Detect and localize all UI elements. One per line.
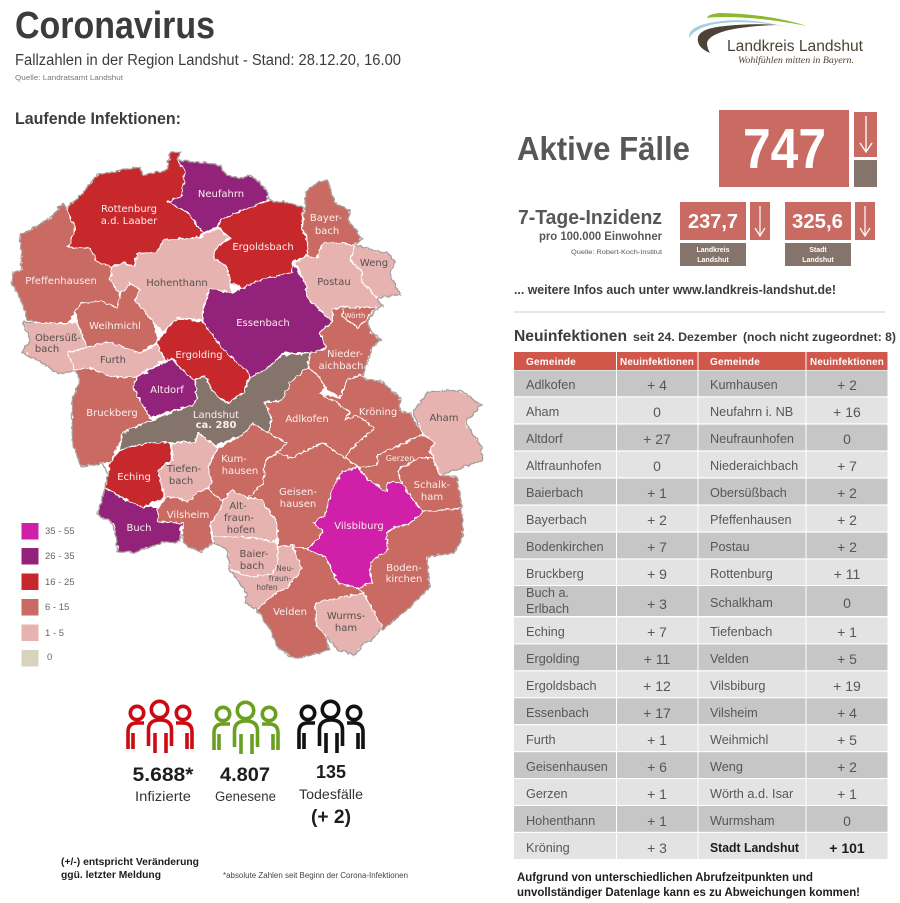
- row: Aham: [526, 405, 559, 419]
- map labels: kirchen: [386, 574, 422, 585]
- row: Altfraunhofen: [526, 459, 601, 473]
- row: + 27: [643, 431, 671, 447]
- stat: recovered: [215, 765, 276, 804]
- region: Buch: [97, 488, 182, 553]
- incidence: Landkreis: 237,7: [688, 211, 738, 233]
- row: [514, 370, 888, 396]
- region: Rottenburg: [67, 152, 203, 267]
- logo swoosh: dark: [698, 24, 777, 53]
- map labels: aichbach: [318, 361, 364, 372]
- row: Niederaichbach: [710, 459, 798, 473]
- region: Ergolding: [157, 318, 250, 403]
- row: + 12: [643, 678, 671, 694]
- incidence: Stadt: [785, 202, 875, 266]
- map labels: hofen: [227, 525, 255, 536]
- row: + 2: [837, 539, 857, 555]
- row: + 9: [647, 566, 667, 582]
- header: [15, 5, 401, 82]
- active cases heading: Aktive Fälle: [517, 130, 690, 167]
- map labels: Pfeffenhausen: [25, 276, 97, 287]
- row: + 7: [647, 539, 667, 555]
- row: [514, 752, 888, 778]
- row: Eching: [526, 625, 565, 639]
- row: + 11: [644, 651, 671, 667]
- map labels: Kum-: [221, 454, 247, 465]
- row: + 5: [837, 651, 857, 667]
- row: Pfeffenhausen: [710, 513, 792, 527]
- region: Aham: [413, 390, 483, 475]
- row: 0: [843, 595, 851, 611]
- incidence heading: Quelle: Robert-Koch-Institut: [571, 249, 662, 256]
- table header: Gemeinde: [526, 357, 576, 368]
- row: Obersüßbach: [710, 486, 787, 500]
- map labels: Ergolding: [175, 350, 223, 361]
- row: Rottenburg: [710, 567, 773, 581]
- row: Adlkofen: [526, 378, 575, 392]
- map labels: Essenbach: [236, 318, 290, 329]
- map labels: [25, 189, 459, 634]
- map: [12, 152, 483, 658]
- region: Eching: [105, 442, 172, 507]
- row: Erlbach: [526, 602, 569, 616]
- map labels: bach: [240, 561, 264, 572]
- map labels: Postau: [317, 277, 351, 288]
- map labels: Altdorf: [150, 385, 184, 396]
- region: Furth: [68, 342, 165, 377]
- region: Baierbach: [213, 537, 278, 577]
- table heading: (noch nicht zugeordnet: 8): [743, 332, 896, 344]
- incidence: Landkreis: [680, 202, 770, 266]
- disclaimer: Aufgrund von unterschiedlichen Abrufzeitpunkten und: [517, 872, 813, 884]
- map labels: Baier-: [240, 549, 269, 560]
- row: Baierbach: [526, 486, 583, 500]
- stat: infected: Infizierte: [135, 789, 191, 804]
- region: Weihmichl: [75, 283, 157, 353]
- row: [514, 479, 888, 504]
- row: 0: [843, 431, 851, 447]
- legend item 0: 0: [47, 652, 52, 663]
- logo name: Landkreis Landshut: [727, 38, 864, 55]
- disclaimer: unvollständiger Datenlage kann es zu Abweichungen kommen!: [517, 887, 860, 899]
- legend item 35-55: [22, 523, 75, 540]
- map labels: ca. 280: [196, 420, 236, 431]
- website note: ... weitere Infos auch unter www.landkreis-landshut.de!: [514, 283, 836, 297]
- legend item 26-35: 26 - 35: [45, 551, 75, 562]
- map labels: Boden-: [386, 563, 422, 574]
- region: Neufraunhofen: [230, 545, 302, 610]
- row: + 1: [647, 813, 667, 829]
- row: Tiefenbach: [710, 625, 772, 639]
- row: Altdorf: [526, 432, 563, 446]
- row: + 7: [647, 624, 667, 640]
- map labels: Wurms-: [327, 611, 366, 622]
- map labels: hofen: [256, 583, 278, 592]
- map labels: hausen: [222, 466, 258, 477]
- table heading: seit 24. Dezember: [633, 332, 738, 344]
- region: Postau: [295, 242, 383, 322]
- table: [514, 352, 888, 859]
- map labels: Neufahrn: [198, 189, 244, 200]
- region: Bruckberg: [72, 368, 152, 467]
- row: Ergoldsbach: [526, 679, 597, 693]
- region: Geisenhausen: [248, 443, 358, 550]
- region: Wurmsham: [315, 593, 382, 655]
- row: Furth: [526, 733, 556, 747]
- logo swoosh: blue: [689, 20, 787, 38]
- logo: [689, 13, 864, 66]
- row: Schalkham: [710, 596, 773, 610]
- row: [514, 725, 888, 751]
- table heading: [514, 328, 896, 345]
- map labels: ham: [421, 492, 443, 503]
- row: + 1: [837, 786, 857, 802]
- region: Landshut: [120, 353, 310, 450]
- row: Wörth a.d. Isar: [710, 787, 794, 801]
- row: + 5: [837, 732, 857, 748]
- subtitle: Fallzahlen in der Region Landshut - Stand: 28.12.20, 16.00: [15, 52, 401, 69]
- row: Wurmsham: [710, 814, 775, 828]
- region: Niederaichbach: [308, 306, 382, 398]
- legend item 16-25: [22, 574, 75, 590]
- map labels: Schalk-: [414, 480, 451, 491]
- row: Hohenthann: [526, 814, 595, 828]
- row: [514, 779, 888, 805]
- row: Kumhausen: [710, 378, 778, 392]
- map labels: a.d. Laaber: [101, 216, 158, 227]
- row: Bayerbach: [526, 513, 587, 527]
- row: [514, 644, 888, 670]
- stat: deaths: 135: [316, 762, 346, 782]
- active cases box: 747: [743, 117, 826, 181]
- row: [514, 671, 888, 697]
- row: Essenbach: [526, 706, 589, 720]
- table header: Gemeinde: [710, 357, 760, 368]
- icon: recovered people: [214, 702, 278, 754]
- row: + 2: [837, 759, 857, 775]
- icon: deceased people: [299, 701, 363, 753]
- map labels: Bayer-: [310, 213, 342, 224]
- region: Schalkham: [397, 458, 462, 512]
- row: + 1: [647, 732, 667, 748]
- note: change explanation: ggü. letzter Meldung: [61, 869, 161, 881]
- region: Vilsheim: [158, 488, 223, 552]
- map labels: Ergoldsbach: [232, 242, 294, 253]
- map labels: Wörth: [345, 312, 365, 320]
- incidence: Landkreis: Landshut: [697, 257, 729, 264]
- row: + 11: [834, 566, 861, 582]
- row: Gerzen: [526, 787, 568, 801]
- region: Ergoldsbach: [213, 200, 308, 288]
- row: + 3: [647, 596, 667, 612]
- row: [514, 533, 888, 558]
- region: Pfeffenhausen: [12, 203, 120, 323]
- row: 0: [653, 458, 661, 474]
- region: Woerth: [342, 306, 377, 328]
- row: + 101: [829, 840, 865, 856]
- region: Bayerbach: [302, 180, 362, 258]
- map labels: Hohenthann: [146, 278, 208, 289]
- row: [514, 398, 888, 423]
- map labels: Aham: [429, 413, 459, 424]
- region: Kroening: [320, 375, 423, 468]
- row: Neufahrn i. NB: [710, 405, 793, 419]
- note: change explanation: (+/-) entspricht Veränderung: [61, 856, 199, 868]
- incidence: Stadt: 325,6: [792, 211, 843, 233]
- note: change explanation: [61, 856, 199, 881]
- map labels: Neu-: [276, 564, 294, 573]
- map regions: [12, 152, 483, 658]
- map labels: hausen: [280, 499, 316, 510]
- legend item 16-25: 16 - 25: [45, 577, 75, 588]
- row: + 4: [837, 705, 857, 721]
- row: + 3: [647, 840, 667, 856]
- region: Altfraunhofen: [210, 490, 277, 542]
- map labels: Furth: [100, 355, 126, 366]
- row: [514, 425, 888, 450]
- row: Weng: [710, 760, 743, 774]
- row: Geisenhausen: [526, 760, 608, 774]
- map labels: Alt-: [229, 501, 247, 512]
- map heading: Laufende Infektionen:: [15, 110, 181, 128]
- row: + 17: [643, 705, 671, 721]
- map labels: bach: [169, 476, 193, 487]
- row: Vilsheim: [710, 706, 758, 720]
- map labels: Vilsbiburg: [334, 521, 384, 532]
- row: + 4: [647, 377, 667, 393]
- title: Coronavirus: [15, 5, 215, 47]
- map labels: fraun-: [269, 574, 292, 583]
- row: [514, 560, 888, 585]
- map labels: bach: [35, 344, 59, 355]
- legend item 1-5: [22, 624, 64, 641]
- row: [514, 506, 888, 531]
- row: [514, 452, 888, 477]
- region: Kumhausen: [208, 423, 287, 500]
- stat: infected: [132, 765, 194, 804]
- legend item 0: [22, 650, 52, 666]
- stat: recovered: Genesene: [215, 789, 276, 804]
- disclaimer: [517, 872, 860, 899]
- row: + 1: [647, 485, 667, 501]
- row: [514, 618, 888, 643]
- row: Vilsbiburg: [710, 679, 765, 693]
- region: Velden: [257, 545, 363, 658]
- map labels: Rottenburg: [101, 204, 157, 215]
- row: 0: [843, 813, 851, 829]
- legend: [22, 523, 75, 666]
- row: + 19: [833, 678, 861, 694]
- map labels: Eching: [117, 472, 151, 483]
- region: Adlkofen: [265, 367, 375, 458]
- region: Essenbach: [203, 263, 332, 378]
- row: Stadt Landshut: [710, 840, 800, 855]
- row: Velden: [710, 652, 749, 666]
- incidence heading: [518, 207, 663, 256]
- map labels: Weihmichl: [89, 321, 141, 332]
- source: Quelle: Landratsamt Landshut: [15, 73, 124, 82]
- stat: recovered: 4.807: [220, 765, 270, 786]
- table heading: Neuinfektionen: [514, 328, 627, 345]
- map labels: Buch: [126, 523, 152, 534]
- map labels: bach: [315, 226, 339, 237]
- table header: Neuinfektionen: [810, 357, 884, 368]
- active cases box: [719, 110, 849, 187]
- row: + 2: [837, 377, 857, 393]
- stat: infected: 5.688*: [132, 765, 194, 786]
- row: Bodenkirchen: [526, 540, 604, 554]
- logo slogan: Wohlfühlen mitten in Bayern.: [738, 55, 854, 66]
- arrow: active cases down: [854, 112, 877, 157]
- row: Weihmichl: [710, 733, 768, 747]
- map labels: Nieder-: [327, 349, 363, 360]
- row: + 2: [837, 512, 857, 528]
- map labels: Velden: [273, 607, 307, 618]
- map labels: Vilsheim: [167, 510, 209, 521]
- map labels: fraun-: [224, 513, 254, 524]
- incidence heading: pro 100.000 Einwohner: [539, 231, 663, 243]
- region: Gerzen: [358, 435, 435, 492]
- stat: deaths: Todesfälle: [299, 787, 363, 802]
- row: + 1: [647, 786, 667, 802]
- map labels: Bruckberg: [86, 408, 138, 419]
- region: Tiefenbach: [158, 433, 218, 503]
- logo swoosh: green: [707, 13, 807, 26]
- region: Hohenthann: [110, 228, 232, 332]
- region: Vilsbiburg: [308, 467, 423, 588]
- region: Obersuessbach: [22, 322, 87, 375]
- table header: Neuinfektionen: [620, 357, 694, 368]
- row: + 16: [833, 404, 861, 420]
- row: + 2: [837, 485, 857, 501]
- map labels: Gerzen: [386, 454, 414, 463]
- row: [514, 806, 888, 832]
- row: + 6: [647, 759, 667, 775]
- legend item 6-15: 6 - 15: [45, 602, 69, 613]
- row: + 7: [837, 458, 857, 474]
- map labels: Landshut: [193, 410, 239, 421]
- legend item 26-35: [22, 548, 75, 564]
- region: Weng: [350, 245, 400, 298]
- icon: infected people: [128, 701, 192, 753]
- row: Kröning: [526, 841, 570, 855]
- map labels: Weng: [360, 258, 388, 269]
- map labels: Adlkofen: [285, 414, 329, 425]
- row: [514, 698, 888, 724]
- row: 0: [653, 404, 661, 420]
- map labels: ham: [335, 623, 357, 634]
- map labels: Geisen-: [279, 487, 317, 498]
- row: Buch a.: [526, 586, 569, 600]
- incidence: Stadt: Landshut: [802, 257, 834, 264]
- row: Ergolding: [526, 652, 580, 666]
- incidence: Landkreis: Landkreis: [696, 247, 730, 254]
- row: + 2: [647, 512, 667, 528]
- region: Altdorf: [133, 358, 197, 418]
- map labels: Kröning: [359, 407, 397, 418]
- row: [514, 833, 888, 859]
- incidence: Stadt: Stadt: [809, 247, 827, 254]
- region: Bodenkirchen: [357, 508, 463, 630]
- legend item 1-5: 1 - 5: [45, 628, 64, 639]
- footnote: *absolute Zahlen seit Beginn der Corona-Infektionen: [223, 871, 408, 880]
- legend item 6-15: [22, 599, 69, 616]
- row: + 1: [837, 624, 857, 640]
- incidence heading: 7-Tage-Inzidenz: [518, 207, 662, 229]
- row: [514, 586, 888, 616]
- region: Neufahrn: [168, 160, 268, 233]
- table header: [514, 352, 888, 370]
- row: Neufraunhofen: [710, 432, 794, 446]
- map labels: Obersüß-: [35, 333, 81, 344]
- stat: deaths: (+ 2): [311, 807, 351, 828]
- legend item 35-55: 35 - 55: [45, 526, 75, 537]
- active cases grey block: [854, 160, 877, 187]
- row: Postau: [710, 540, 750, 554]
- map labels: Tiefen-: [166, 464, 202, 475]
- stat: deaths: [299, 762, 363, 828]
- row: Bruckberg: [526, 567, 584, 581]
